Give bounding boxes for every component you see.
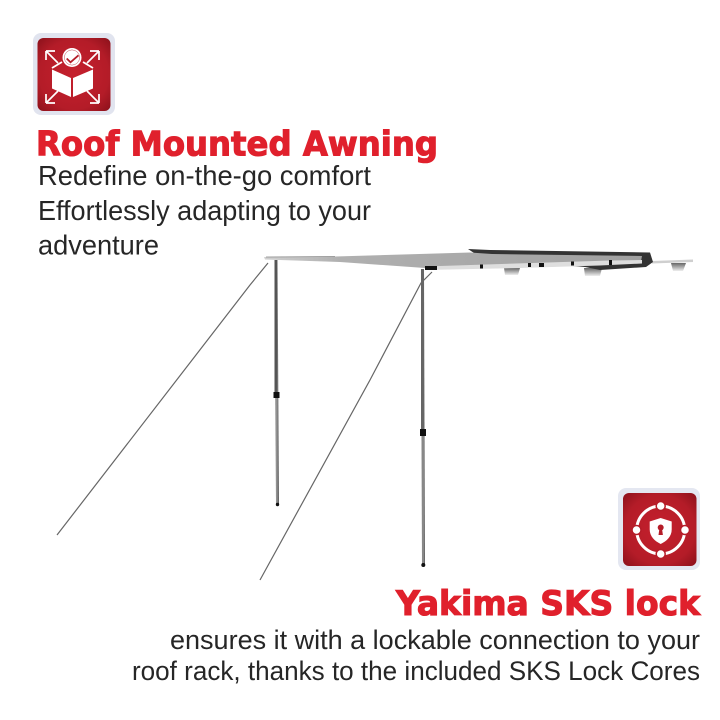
canopy top shadow line: [266, 256, 335, 258]
mounting feet: [504, 263, 686, 276]
text block: lock description: roof rack, thanks to the included SKS Lock Cores: [132, 656, 700, 686]
support pole: left: [274, 260, 280, 506]
grey fabric canopy: [264, 252, 642, 268]
right support bar: [652, 260, 693, 264]
text block: awning description: Redefine on-the-go comfort: [38, 160, 371, 191]
icon: open box with checkmark: [33, 33, 115, 115]
awning product illustration: [57, 249, 693, 580]
awning rail: [425, 260, 642, 270]
rail clips: [425, 260, 612, 270]
dark rolled cover: [468, 249, 653, 270]
heading: Roof Mounted Awning: Roof Mounted Awning: [36, 124, 438, 164]
support pole: right: [420, 269, 426, 567]
heading: Yakima SKS lock: Yakima SKS lock: [395, 584, 701, 624]
text block: awning description: Effortlessly adapting to your: [38, 195, 371, 226]
text block: awning description: [38, 160, 371, 260]
text block: lock description: ensures it with a lockable connection to your: [170, 625, 700, 655]
guy rope: left: [57, 263, 268, 535]
text block: lock description: [132, 625, 700, 686]
icon: shield with keyhole in ring: [618, 488, 700, 570]
guy rope: right: [260, 272, 432, 580]
text block: awning description: adventure: [38, 230, 159, 260]
